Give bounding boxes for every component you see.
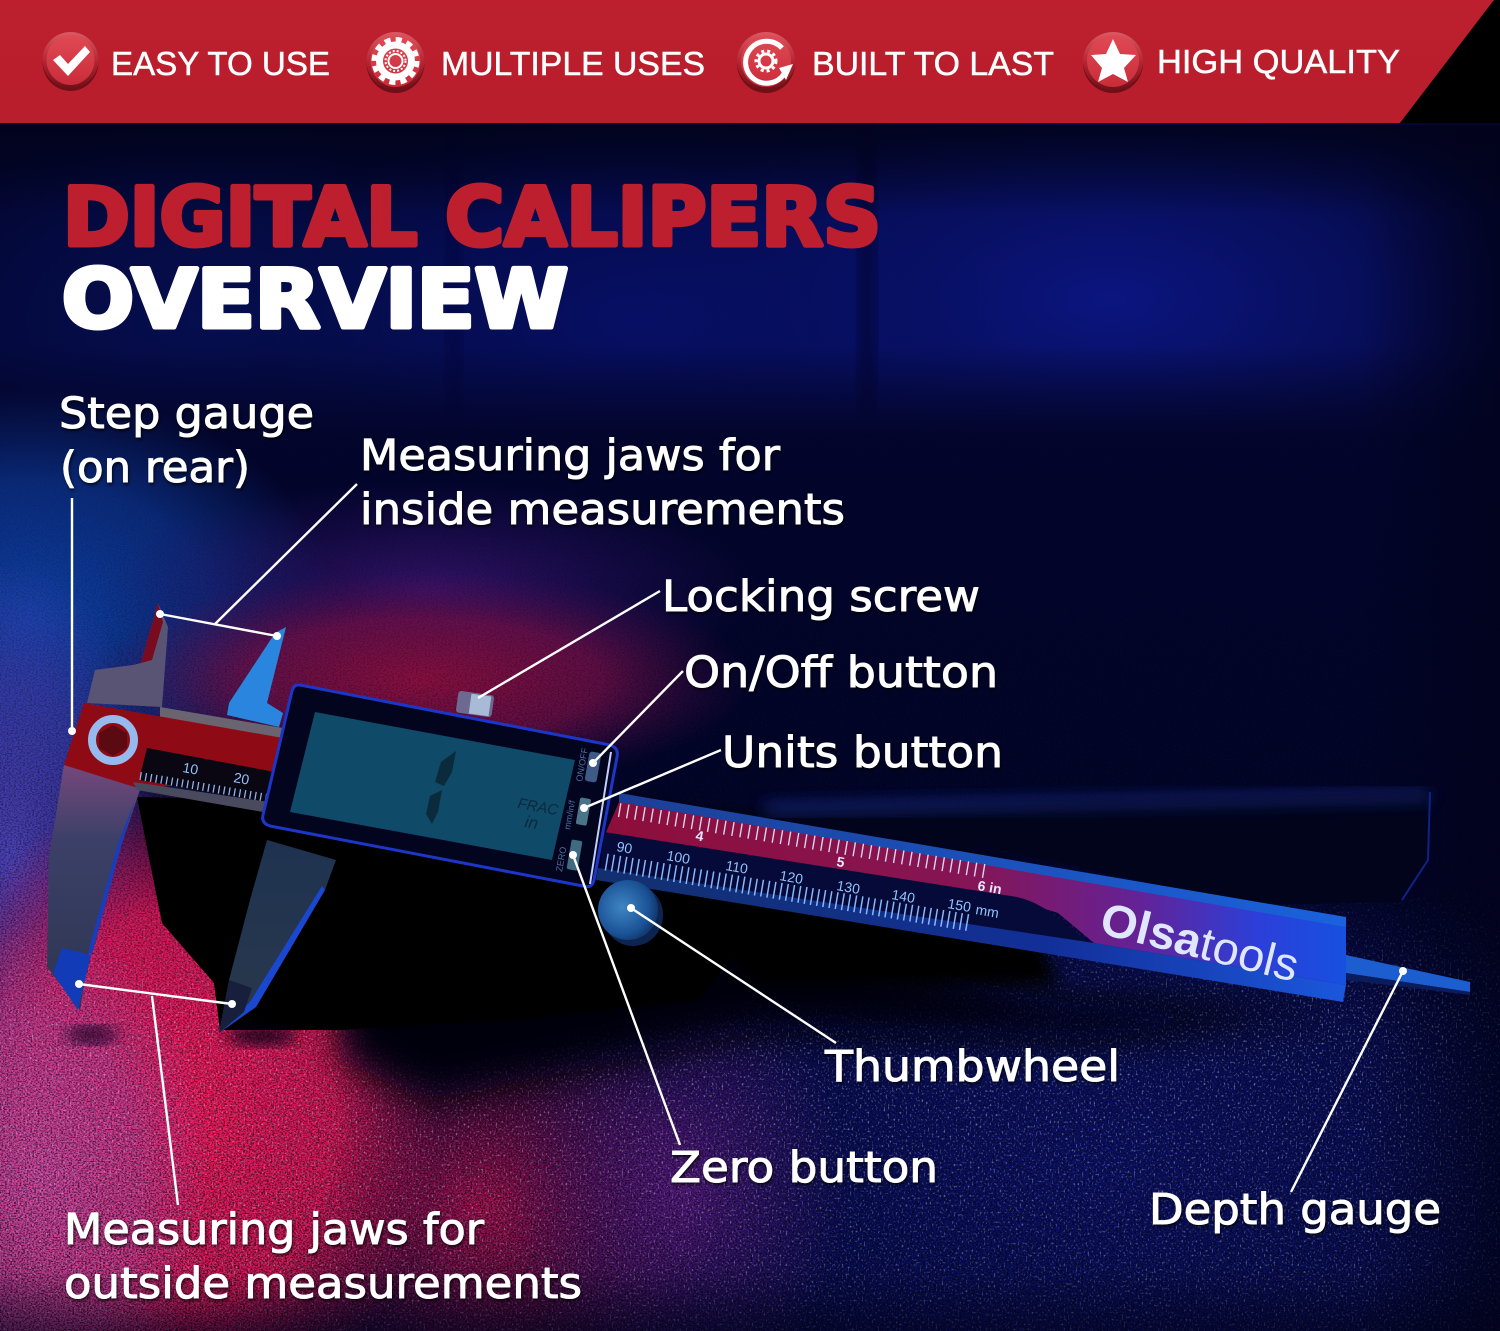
callout: inside measuring jaws: Measuring jaws for <box>360 431 780 481</box>
header banner <box>0 0 1500 123</box>
scale ticks, jaw end <box>140 776 268 798</box>
title: OVERVIEW <box>62 253 568 346</box>
metric numerals <box>615 838 1000 921</box>
fixed jaw red tip <box>141 603 163 663</box>
inch numerals <box>694 827 1003 897</box>
callout: step gauge <box>59 389 314 735</box>
inch numerals: 5 <box>835 853 846 870</box>
callout: zero button <box>569 851 938 1193</box>
depth gauge rod <box>1346 955 1470 992</box>
inside measuring jaw, fixed <box>87 603 168 707</box>
inch numerals: 4 <box>694 827 705 844</box>
LCD screen <box>290 712 575 860</box>
inch ticks <box>619 810 990 872</box>
metric numerals: 110 <box>724 857 749 877</box>
LCD FRAC indicator: FRAC <box>516 795 560 819</box>
LCD digit one <box>426 751 456 824</box>
title: DIGITAL CALIPERS <box>63 171 881 264</box>
feature: multiple uses: MULTIPLE USES <box>441 45 705 82</box>
moving jaw tip <box>219 980 252 1033</box>
callout: depth gauge <box>1149 967 1441 1235</box>
metric scale, jaw end <box>139 748 275 802</box>
title <box>62 171 881 346</box>
caliper <box>47 603 1470 1033</box>
metric numerals: 150 <box>946 895 972 915</box>
lower beam edge <box>596 868 1346 1002</box>
top strip of beam <box>160 707 283 740</box>
moving jaw blue edge <box>219 886 325 1033</box>
metric ticks <box>606 862 970 923</box>
LCD inch indicator: in <box>523 812 540 833</box>
metric numerals: 130 <box>835 877 861 897</box>
control buttons <box>566 751 611 884</box>
red slider band <box>64 703 283 789</box>
display housing <box>263 685 617 887</box>
locking screw <box>456 691 494 717</box>
main beam lip <box>619 793 1346 930</box>
metric scale background <box>600 832 1094 945</box>
metric numerals: mm <box>974 901 1000 921</box>
outside measuring jaw, moving <box>219 840 336 1033</box>
main beam band <box>604 802 1346 985</box>
brand logo text: Olsatools <box>1096 892 1304 992</box>
callout: thumbwheel: Thumbwheel <box>824 1042 1120 1092</box>
callout: units button <box>580 728 1003 812</box>
callout: on/off button: On/Off button <box>684 648 998 698</box>
callout: locking screw: Locking screw <box>662 572 980 622</box>
feature: easy to use: EASY TO USE <box>111 45 330 82</box>
callout: step gauge: (on rear) <box>60 443 250 493</box>
metric numerals: 140 <box>890 886 916 906</box>
callout: thumbwheel <box>627 904 1120 1092</box>
fixed jaw blue edge <box>88 800 135 955</box>
rear block behind the scale <box>700 792 1430 905</box>
shadow under caliper <box>66 797 1340 1100</box>
icon: gear <box>366 32 424 93</box>
thumbwheel <box>598 880 663 946</box>
metric numerals: 120 <box>778 867 804 887</box>
callout: outside measuring jaws: Measuring jaws for <box>64 1205 484 1255</box>
icon: check mark <box>42 32 98 91</box>
hex logo ring <box>92 719 134 761</box>
scale number 20: 20 <box>232 769 251 788</box>
callout: outside measuring jaws <box>64 980 582 1309</box>
feature: high quality: HIGH QUALITY <box>1157 43 1400 80</box>
callout: inside measuring jaws <box>156 431 845 640</box>
silver strip <box>133 782 269 812</box>
scale number 10: 10 <box>181 759 200 778</box>
callout: depth gauge: Depth gauge <box>1149 1185 1441 1235</box>
metric numerals: 90 <box>615 838 634 857</box>
inch numerals: 6 in <box>976 877 1003 897</box>
feature: built to last: BUILT TO LAST <box>812 45 1054 82</box>
icon: rotate gear <box>737 32 795 93</box>
callout: locking screw <box>478 572 980 698</box>
fixed jaw tip <box>53 948 91 1010</box>
inside measuring jaw, moving <box>227 627 286 727</box>
callout: units button: Units button <box>722 728 1003 778</box>
button caption on/off: ON/OFF <box>574 747 590 782</box>
button caption zero: ZERO <box>554 846 568 872</box>
metric numerals: 100 <box>665 847 691 867</box>
button caption units: mm/in/f <box>562 799 577 830</box>
icon: star <box>1083 32 1143 93</box>
callout: step gauge: Step gauge <box>59 389 314 439</box>
callout: outside measuring jaws: outside measurements <box>64 1259 582 1309</box>
outside measuring jaw, fixed <box>47 765 141 1010</box>
callout: zero button: Zero button <box>670 1143 938 1193</box>
callout: on/off button <box>589 648 998 767</box>
callout: inside measuring jaws: inside measurements <box>360 485 845 535</box>
